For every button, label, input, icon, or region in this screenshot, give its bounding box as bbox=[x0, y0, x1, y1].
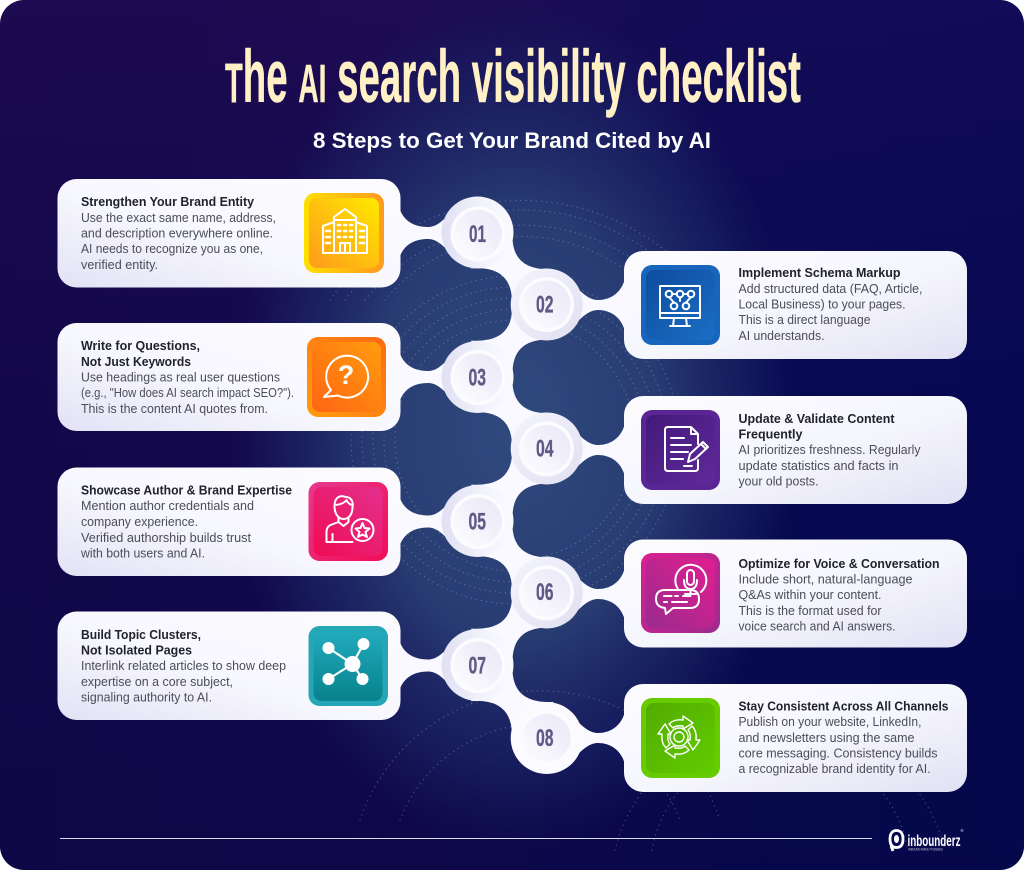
step 5 text bbox=[80, 482, 292, 560]
step 1 text: and description everywhere online. bbox=[81, 226, 273, 240]
logo: inbounderz: INBOUND MADE POSSIBLE bbox=[908, 848, 944, 852]
logo: inbounderz: inbounderz bbox=[908, 833, 960, 850]
step 5 text: with both users and AI. bbox=[80, 546, 205, 560]
icon: question bubble: ? bbox=[338, 360, 354, 390]
step 3 text: Not Just Keywords bbox=[81, 354, 191, 369]
step 1 text bbox=[81, 194, 276, 272]
step 05 number node bbox=[442, 485, 514, 557]
icon: person with star badge bbox=[308, 482, 388, 561]
step 2 text: Add structured data (FAQ, Article, bbox=[738, 281, 922, 296]
step 2 text: AI understands. bbox=[738, 328, 824, 343]
step 5 text: company experience. bbox=[81, 514, 198, 529]
step 8 text: and newsletters using the same bbox=[738, 730, 914, 745]
icon: hub and nodes network bbox=[308, 626, 388, 706]
panel: step 3 questions bbox=[58, 323, 400, 431]
step 4 text: your old posts. bbox=[738, 474, 818, 488]
step 3 text bbox=[81, 338, 294, 416]
step 5 text: Verified authorship builds trust bbox=[81, 530, 251, 545]
step 6 text: voice search and AI answers. bbox=[738, 618, 896, 634]
icon: question bubble bbox=[307, 337, 386, 417]
subtitle: 8 Steps to Get Your Brand Cited by AI bbox=[313, 128, 711, 153]
step 8 text bbox=[738, 698, 948, 776]
icon: monitor with network bbox=[641, 265, 720, 345]
step 2 text: This is a direct language bbox=[738, 312, 870, 327]
step 5 text: Mention author credentials and bbox=[81, 498, 254, 513]
step 6 text: This is the format used for bbox=[738, 603, 882, 618]
connector network between steps bbox=[398, 201, 626, 770]
step 2 text: Local Business) to your pages. bbox=[738, 296, 906, 312]
step 7 text: Build Topic Clusters, bbox=[81, 627, 201, 642]
panel: step 6 voice and conversation bbox=[624, 540, 967, 648]
footer divider line bbox=[60, 838, 872, 839]
panel: step 7 topic clusters bbox=[58, 612, 400, 720]
step 7 text: signaling authority to AI. bbox=[81, 690, 212, 704]
icon: document and pen bbox=[641, 410, 720, 490]
step 02 number node bbox=[511, 268, 583, 340]
step 08 number node bbox=[511, 702, 583, 774]
step 01 number node bbox=[442, 196, 514, 268]
step 4 text bbox=[738, 411, 921, 488]
step 2 text bbox=[738, 265, 922, 343]
step 01 number node: 01 bbox=[469, 221, 486, 248]
step 8 text: a recognizable brand identity for AI. bbox=[738, 761, 930, 776]
step 3 text: Use headings as real user questions bbox=[81, 370, 280, 384]
step 4 text: update statistics and facts in bbox=[738, 458, 898, 473]
step 05 number node: 05 bbox=[468, 508, 486, 536]
panel: step 5 author expertise bbox=[58, 468, 400, 576]
step 8 text: Publish on your website, LinkedIn, bbox=[738, 714, 922, 729]
step 4 text: Update & Validate Content bbox=[738, 411, 895, 426]
step 5 text: Showcase Author & Brand Expertise bbox=[81, 482, 292, 498]
step 3 text: Write for Questions, bbox=[81, 338, 200, 353]
logo: inbounderz: ® bbox=[960, 828, 964, 833]
step 7 text: expertise on a core subject, bbox=[81, 674, 233, 689]
panel: step 4 update content bbox=[624, 396, 967, 504]
step 8 text: core messaging. Consistency builds bbox=[738, 746, 938, 760]
step 02 number node: 02 bbox=[536, 292, 554, 318]
step 6 text bbox=[738, 556, 940, 634]
step 7 text: Interlink related articles to show deep bbox=[81, 658, 286, 673]
step 06 number node bbox=[511, 556, 583, 628]
step 2 text: Implement Schema Markup bbox=[738, 265, 901, 280]
step 3 text: (e.g., "How does AI search impact SEO?"). bbox=[81, 385, 294, 400]
panel: step 2 schema markup bbox=[624, 251, 967, 359]
icon: cycle arrows bbox=[641, 698, 720, 778]
step 03 number node: 03 bbox=[468, 364, 486, 392]
step 4 text: AI prioritizes freshness. Regularly bbox=[738, 442, 921, 457]
step 7 text: Not Isolated Pages bbox=[81, 642, 192, 658]
step 08 number node: 08 bbox=[536, 725, 554, 752]
step 6 text: Optimize for Voice & Conversation bbox=[738, 556, 940, 571]
step 07 number node bbox=[442, 629, 514, 701]
step 06 number node: 06 bbox=[536, 579, 554, 606]
logo: inbounderz bbox=[890, 828, 964, 852]
icon: building bbox=[304, 193, 384, 273]
step 6 text: Include short, natural-language bbox=[738, 572, 912, 586]
step 6 text: Q&As within your content. bbox=[738, 587, 882, 602]
step 1 text: Strengthen Your Brand Entity bbox=[81, 194, 255, 209]
step 04 number node bbox=[511, 412, 583, 484]
step 1 text: verified entity. bbox=[81, 257, 158, 272]
step 4 text: Frequently bbox=[738, 426, 803, 442]
icon: microphone and chat bubble bbox=[641, 553, 720, 633]
step 04 number node: 04 bbox=[536, 436, 554, 462]
step 7 text bbox=[81, 627, 286, 704]
step 3 text: This is the content AI quotes from. bbox=[81, 401, 268, 416]
step 1 text: Use the exact same name, address, bbox=[81, 210, 276, 225]
panel: step 1 brand entity bbox=[58, 179, 400, 288]
step 03 number node bbox=[442, 341, 514, 413]
step 1 text: AI needs to recognize you as one, bbox=[81, 241, 263, 256]
panel: step 8 consistent channels bbox=[624, 684, 967, 792]
step 07 number node: 07 bbox=[468, 652, 486, 680]
step 8 text: Stay Consistent Across All Channels bbox=[738, 698, 948, 714]
